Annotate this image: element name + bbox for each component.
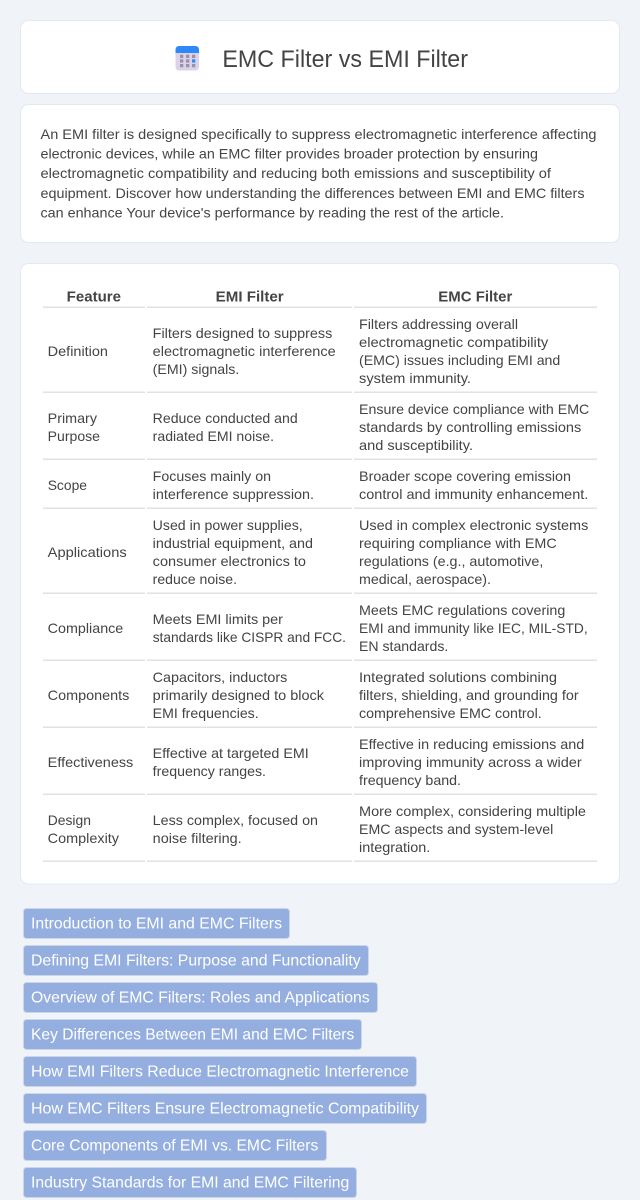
row: design complexity: EMC aspects and system-level <box>359 821 553 837</box>
panel: comparison table <box>20 264 620 884</box>
link: how EMI filters reduce interference: How EMI Filters Reduce Electromagnetic Interference <box>31 1064 409 1081</box>
row: scope <box>48 468 588 502</box>
link: industry standards: Industry Standards for EMI and EMC Filtering <box>31 1175 349 1192</box>
panel: title card <box>20 20 620 94</box>
row: compliance: Compliance <box>48 620 124 636</box>
row: effectiveness: improving immunity across a wider <box>359 754 582 770</box>
row: applications: consumer electronics to <box>153 553 306 569</box>
link: how EMI filters reduce interference <box>24 1056 416 1086</box>
table header: Feature <box>67 288 121 305</box>
link: how EMC filters ensure compatibility <box>24 1094 426 1124</box>
row: components: EMI frequencies. <box>153 705 259 721</box>
row: components: primarily designed to block <box>153 687 325 703</box>
row: components: Capacitors, inductors <box>153 669 287 685</box>
row: components <box>48 669 579 721</box>
link: overview of EMC filters: Overview of EMC Filters: Roles and Applications <box>31 990 370 1007</box>
table header: EMI Filter <box>216 288 284 305</box>
row: design complexity: Design <box>48 812 91 828</box>
row: compliance: EMI and immunity like IEC, MIL-STD, <box>359 620 588 636</box>
row: primary purpose <box>48 401 589 453</box>
row: components: comprehensive EMC control. <box>359 705 542 721</box>
row: components: Components <box>48 687 129 703</box>
text block: introduction: can enhance Your device's performance by reading the rest of the article. <box>40 204 504 220</box>
row: compliance: EN standards. <box>359 638 448 654</box>
row: design complexity: noise filtering. <box>153 830 242 846</box>
row: primary purpose: Purpose <box>48 428 100 444</box>
row: definition: electromagnetic interference <box>153 343 336 359</box>
row: primary purpose: Primary <box>48 410 97 426</box>
icon: calendar <box>176 46 199 70</box>
row: scope: Scope <box>48 477 87 493</box>
table header <box>67 288 512 305</box>
link: defining EMI filters <box>24 946 368 976</box>
link: core components <box>24 1130 326 1160</box>
link: how EMC filters ensure compatibility: How EMC Filters Ensure Electromagnetic Compatibility <box>31 1101 419 1118</box>
row: definition <box>48 316 560 386</box>
row: definition: electromagnetic compatibility <box>359 334 548 350</box>
panel: section links <box>24 908 426 1198</box>
row: effectiveness: Effective at targeted EMI <box>153 745 309 761</box>
title: EMC Filter vs EMI Filter <box>222 46 468 73</box>
row: definition: Filters addressing overall <box>359 316 518 332</box>
row: applications <box>48 517 588 587</box>
row: effectiveness: Effectiveness <box>48 754 133 770</box>
row: primary purpose: standards by controlling emissions <box>359 419 581 435</box>
row: primary purpose: and susceptibility. <box>359 437 473 453</box>
row: applications: Used in power supplies, <box>153 517 303 533</box>
row: definition: Definition <box>48 343 108 359</box>
row: design complexity: integration. <box>359 839 430 855</box>
row: primary purpose: Reduce conducted and <box>153 410 298 426</box>
link: industry standards <box>24 1168 356 1198</box>
row: components: filters, shielding, and grounding for <box>359 687 579 703</box>
row: applications: requiring compliance with EMC <box>359 535 557 551</box>
text block: introduction: An EMI filter is designed specifically to suppress electromagnetic interference affecting <box>40 126 596 142</box>
row: scope: interference suppression. <box>153 486 314 502</box>
row: compliance <box>48 602 588 654</box>
row: compliance: standards like CISPR and FCC. <box>153 629 346 645</box>
row: definition: system immunity. <box>359 370 471 386</box>
row: effectiveness: frequency band. <box>359 772 461 788</box>
row: compliance: Meets EMI limits per <box>153 611 283 627</box>
link: introduction: Introduction to EMI and EMC Filters <box>31 916 282 933</box>
row: design complexity: Complexity <box>48 830 119 846</box>
row: definition: (EMI) signals. <box>153 361 239 377</box>
table header: EMC Filter <box>438 288 512 305</box>
row: design complexity <box>48 803 586 855</box>
link: key differences: Key Differences Between EMI and EMC Filters <box>31 1027 354 1044</box>
row: design complexity: More complex, considering multiple <box>359 803 586 819</box>
text block: introduction: electronic devices, while an EMC filter provides broader protection by ensuring <box>40 146 538 162</box>
link: defining EMI filters: Defining EMI Filters: Purpose and Functionality <box>31 953 361 970</box>
row: effectiveness: Effective in reducing emissions and <box>359 736 584 752</box>
text block: introduction: equipment. Discover how understanding the differences between EMI and EMC filters <box>40 185 584 201</box>
row: applications: industrial equipment, and <box>153 535 313 551</box>
row: components: Integrated solutions combining <box>359 669 557 685</box>
row: scope: control and immunity enhancement. <box>359 486 588 502</box>
row: applications: regulations (e.g., automotive, <box>359 553 543 569</box>
row: primary purpose: radiated EMI noise. <box>153 428 274 444</box>
row: applications: reduce noise. <box>153 571 237 587</box>
row: effectiveness: frequency ranges. <box>153 763 266 779</box>
row: scope: Focuses mainly on <box>153 468 271 484</box>
row: applications: Used in complex electronic systems <box>359 517 588 533</box>
row: compliance: Meets EMC regulations covering <box>359 602 565 618</box>
link: overview of EMC filters <box>24 982 378 1012</box>
link: key differences <box>24 1020 362 1050</box>
row: definition: Filters designed to suppress <box>153 325 332 341</box>
row: effectiveness <box>48 736 584 788</box>
row: primary purpose: Ensure device compliance with EMC <box>359 401 589 417</box>
link: introduction <box>24 908 290 938</box>
text block: introduction: electromagnetic compatibility and reducing both emissions and susceptibility of <box>40 165 551 181</box>
row: applications: Applications <box>48 544 127 560</box>
panel: introduction <box>20 104 620 242</box>
link: core components: Core Components of EMI vs. EMC Filters <box>31 1138 318 1155</box>
row: applications: medical, aerospace). <box>359 571 491 587</box>
row: design complexity: Less complex, focused on <box>153 812 318 828</box>
row: definition: (EMC) issues including EMI and <box>359 352 560 368</box>
row: scope: Broader scope covering emission <box>359 468 571 484</box>
text block: introduction <box>40 126 596 220</box>
